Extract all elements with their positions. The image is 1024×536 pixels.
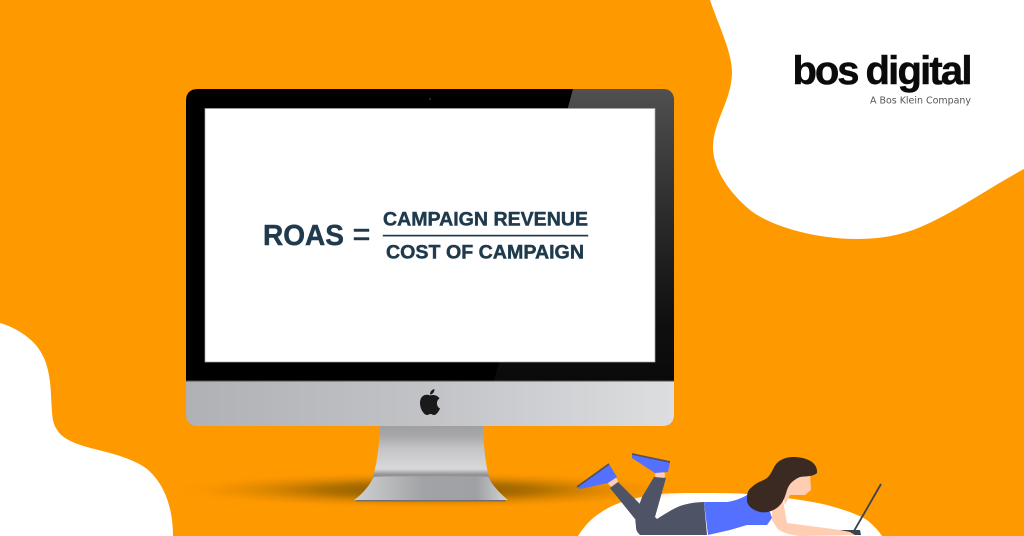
fraction line xyxy=(383,235,588,236)
white blob: bottom right xyxy=(578,493,882,536)
bezel glare xyxy=(494,89,674,381)
apple logo xyxy=(420,389,440,415)
ROAS label: ROAS xyxy=(263,220,344,252)
laptop base xyxy=(838,530,861,535)
back leg xyxy=(610,482,641,519)
hair xyxy=(747,457,817,512)
shoe right xyxy=(632,454,670,473)
shoe left xyxy=(577,464,617,489)
white blob: bottom left xyxy=(0,323,173,536)
logo wordmark: digital xyxy=(866,49,972,93)
arm and neck xyxy=(772,500,855,536)
logo wordmark: bos xyxy=(792,49,860,93)
screen xyxy=(205,108,655,362)
chin xyxy=(186,381,674,426)
denominator: COST OF CAMPAIGN xyxy=(386,242,584,264)
woman on laptop xyxy=(577,454,881,536)
white blob: top right xyxy=(710,0,1024,239)
monitor shadow xyxy=(165,471,695,509)
logo xyxy=(792,49,972,106)
formula xyxy=(263,208,588,264)
stand base xyxy=(354,476,508,500)
camera xyxy=(429,98,431,100)
numerator: CAMPAIGN REVENUE xyxy=(383,208,588,230)
feet skin xyxy=(608,477,618,487)
bezel xyxy=(186,89,674,381)
stand xyxy=(354,426,508,500)
laptop screen xyxy=(854,484,881,531)
stand foot edge xyxy=(356,500,506,502)
front leg and hips xyxy=(635,477,707,535)
torso xyxy=(704,495,772,535)
logo tagline: A Bos Klein Company xyxy=(870,96,971,106)
monitor xyxy=(186,89,674,502)
equals sign xyxy=(354,229,369,240)
logo wordmark xyxy=(792,49,972,93)
face xyxy=(780,472,811,505)
chin top edge xyxy=(186,380,674,382)
